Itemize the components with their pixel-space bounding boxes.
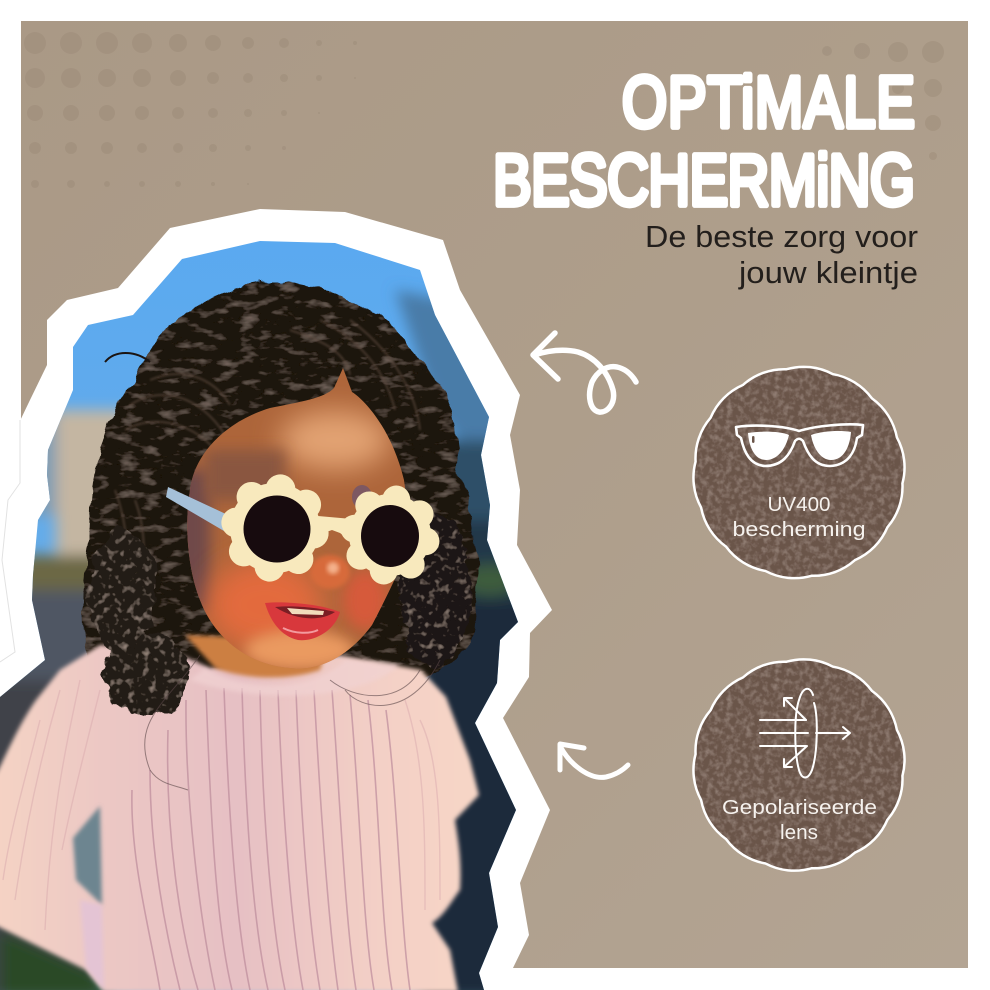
badge shape [684, 649, 914, 881]
hair highlights [114, 319, 422, 546]
subtitle [645, 219, 918, 290]
left lens [244, 496, 310, 562]
subtitle: De beste zorg voor [645, 219, 918, 254]
badge label [722, 797, 877, 844]
sweater [0, 645, 479, 990]
hair: back mass [83, 282, 477, 716]
icon: polarized light rays [760, 689, 850, 778]
face [187, 368, 406, 668]
mouth [265, 602, 340, 640]
badge label: bescherming [732, 519, 866, 541]
icon: sunglasses [736, 424, 863, 466]
flower frame shadow [352, 485, 371, 506]
badge shape [684, 356, 914, 589]
badge label: lens [780, 822, 818, 844]
arrow: swoosh arrow to photo [560, 744, 628, 777]
photo background: sky and blurred street [0, 230, 550, 990]
sunglasses temple arm [166, 487, 228, 531]
photo: child wearing flower sunglasses [0, 230, 550, 990]
hair: curls over shoulder and right side [88, 512, 471, 715]
badge label [732, 494, 866, 541]
badge: UV400 protection [684, 356, 914, 589]
right lens [361, 505, 419, 567]
title: OPTiMALE [622, 62, 915, 142]
title [493, 62, 915, 220]
right flower frame [342, 486, 440, 584]
hair: loose top strand [105, 353, 150, 362]
neck [185, 635, 330, 677]
arrow: curly arrow to photo [533, 333, 636, 412]
loose hair strands [145, 655, 440, 790]
title: BESCHERMiNG [493, 140, 915, 220]
badge: polarized lens [684, 649, 914, 881]
subtitle: jouw kleintje [738, 255, 918, 290]
badge label: Gepolariseerde [722, 797, 877, 819]
sunglasses [166, 474, 440, 584]
badge label: UV400 [768, 494, 830, 516]
left flower frame [221, 474, 329, 582]
bridge [318, 516, 346, 534]
white torn paper outline [0, 209, 552, 990]
